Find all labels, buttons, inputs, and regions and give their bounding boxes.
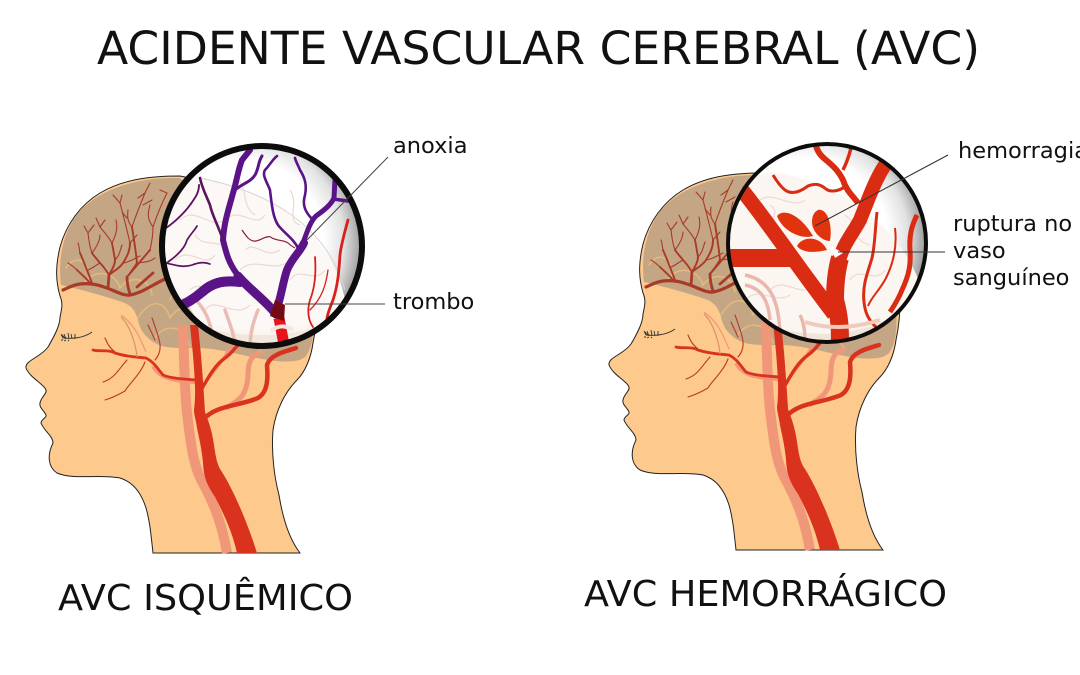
- label: ruptura no vaso sanguíneo: vaso: [953, 238, 1006, 264]
- panel: AVC hemorrágico: [584, 138, 1080, 615]
- panel: AVC isquêmico: [26, 133, 474, 619]
- illustration: head with arteries (right): [609, 173, 900, 550]
- heading: AVC isquêmico: AVC ISQUÊMICO: [58, 577, 353, 619]
- label: ruptura no vaso sanguíneo: sanguíneo: [953, 265, 1069, 291]
- magnifier: hemorrhagic stroke: [726, 144, 926, 345]
- label: anoxia: anoxia: [393, 133, 467, 159]
- label: ruptura no vaso sanguíneo: ruptura no: [953, 211, 1072, 237]
- label: ruptura no vaso sanguíneo: [838, 211, 1072, 291]
- rupture tear: [826, 243, 843, 258]
- label: anoxia: [307, 133, 467, 240]
- ischemic vessels: [176, 150, 348, 314]
- bright red twigs: [308, 220, 348, 327]
- thrombus: [270, 300, 285, 321]
- magnifier: ischemic stroke: [160, 146, 362, 350]
- title: ACIDENTE VASCULAR CEREBRAL (AVC): [97, 22, 980, 75]
- label: trombo: trombo: [393, 289, 474, 315]
- hemorrhage drops: [777, 210, 831, 252]
- label: hemorragia: [815, 138, 1080, 226]
- illustration: head with arteries (left): [26, 176, 317, 553]
- heading: AVC hemorrágico: AVC HEMORRÁGICO: [584, 573, 947, 615]
- ruptured arteries: [726, 146, 917, 345]
